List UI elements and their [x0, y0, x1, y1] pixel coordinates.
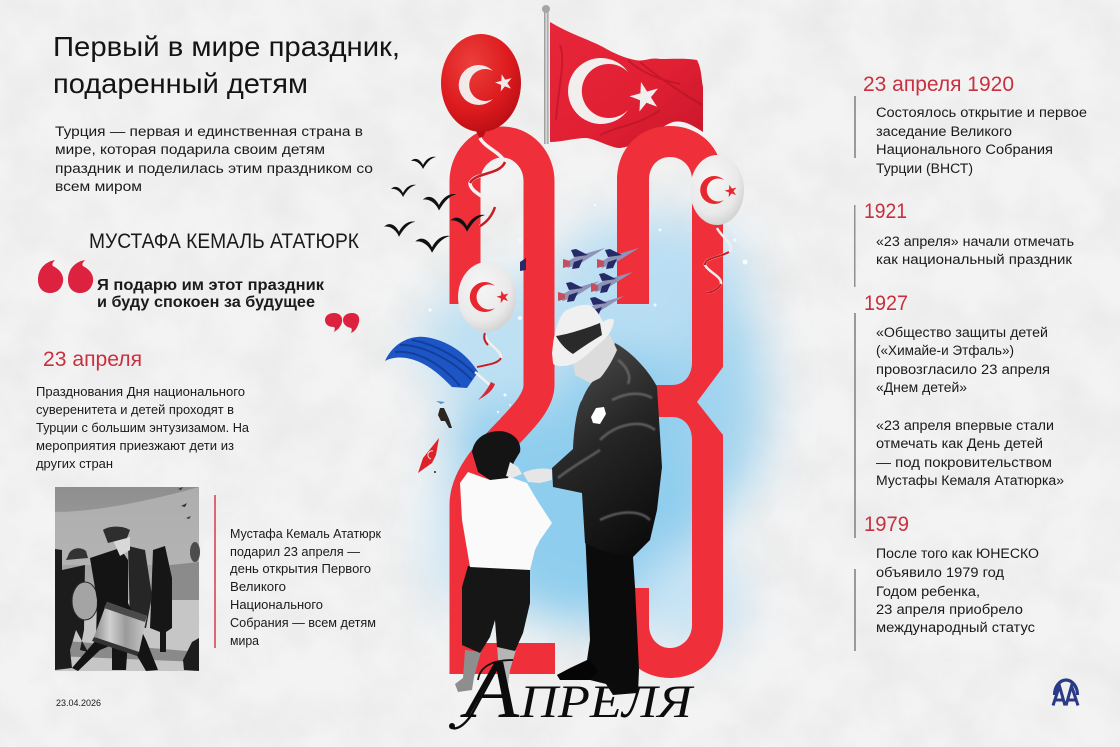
paratrooper	[436, 401, 452, 428]
timeline: 1979: Годом ребенка,	[876, 584, 980, 600]
heading: подаренный детям	[53, 68, 308, 99]
Turkish flag	[550, 22, 703, 148]
legs	[557, 530, 645, 695]
timeline: 1921: как национальный праздник	[876, 252, 1073, 268]
section: 23 апреля: мероприятия приезжают дети из	[36, 438, 234, 453]
timeline: 1927: 1927	[864, 292, 908, 315]
hand	[523, 469, 552, 483]
photo caption: мира	[230, 633, 260, 648]
face	[573, 335, 617, 383]
timeline: 23 апреля 1920: 23 апреля 1920	[863, 73, 1014, 96]
blue sky cloud	[420, 204, 765, 650]
birds	[384, 157, 485, 253]
photo caption: день открытия Первого	[230, 561, 371, 576]
title: Апреля	[449, 643, 695, 736]
quote text: Я подарю им этот праздник	[97, 277, 325, 294]
timeline: 1927: «Днем детей»	[876, 380, 967, 396]
timeline: 1979: объявило 1979 год	[876, 565, 1005, 581]
timeline: 1927: Мустафы Кемаля Ататюрка»	[876, 473, 1064, 489]
date: 23.04.2026	[56, 698, 101, 709]
timeline: 1979: международный статус	[876, 620, 1035, 636]
timeline: 23 апреля 1920	[854, 73, 1087, 177]
timeline: 1927: отмечать как День детей	[876, 436, 1043, 452]
head	[472, 431, 520, 480]
heading	[53, 31, 400, 99]
quote text	[97, 277, 325, 311]
photo caption: Великого	[230, 579, 286, 594]
digit 2	[465, 142, 555, 658]
intro text: всем миром	[55, 179, 142, 195]
heading: Первый в мире праздник,	[53, 31, 400, 62]
section: 23 апреля: 23 апреля	[43, 348, 142, 371]
jacket highlights	[558, 360, 655, 520]
photo caption: Мустафа Кемаль Ататюрк	[230, 526, 381, 541]
balloon: white left	[458, 262, 516, 367]
hat	[552, 305, 614, 366]
jacket	[552, 343, 662, 557]
timeline: 1927	[854, 292, 1064, 538]
timeline: 1927: («Химайе-и Этфаль»)	[876, 343, 1014, 359]
photo caption: Национального	[230, 597, 323, 612]
pocket square	[591, 407, 606, 424]
section: 23 апреля: других стран	[36, 456, 113, 471]
timeline: 1921: 1921	[864, 200, 907, 223]
quote text: и буду спокоен за будущее	[97, 294, 315, 311]
balloon: red	[441, 34, 521, 226]
small red flag	[418, 438, 439, 473]
timeline: 23 апреля 1920: Национального Собрания	[876, 142, 1053, 158]
timeline: 1979	[854, 513, 1039, 651]
intro text: Турция — первая и единственная страна в	[55, 124, 363, 140]
shorts	[462, 566, 530, 653]
big number 23	[465, 126, 723, 678]
timeline: 1927: «Общество защиты детей	[876, 325, 1048, 341]
timeline: 1979: 23 апреля приобрело	[876, 602, 1023, 618]
icon: closing quote marks	[325, 313, 359, 333]
timeline: 23 апреля 1920: Состоялось открытие и первое	[876, 105, 1087, 121]
timeline: 1979: 1979	[864, 513, 909, 536]
icon: AA agency logo	[1053, 680, 1078, 706]
timeline: 23 апреля 1920: заседание Великого	[876, 124, 1012, 140]
section: 23 апреля: суверенитета и детей проходят в	[36, 402, 234, 417]
timeline: 1921	[854, 200, 1074, 287]
balloon: white right	[690, 155, 744, 293]
photo: children's marching band	[55, 487, 200, 671]
intro text: праздник и поделилась этим праздником со	[55, 161, 373, 177]
timeline: 1979: После того как ЮНЕСКО	[876, 546, 1039, 562]
section: 23 апреля: Турции с большим энтузизамом. На	[36, 420, 250, 435]
section: 23 апреля	[36, 348, 250, 471]
timeline: 23 апреля 1920: Турции (ВНСТ)	[876, 161, 973, 177]
caption rule	[214, 495, 216, 648]
quote author: МУСТАФА КЕМАЛЬ АТАТЮРК	[89, 230, 360, 253]
parachute	[385, 337, 495, 400]
icon: opening quote marks	[38, 260, 93, 293]
digit 3	[617, 126, 723, 678]
shirt	[460, 472, 552, 570]
flag pole	[542, 5, 550, 144]
boy figure	[455, 431, 552, 692]
section: 23 апреля: Празднования Дня национального	[36, 384, 245, 399]
legs	[455, 650, 481, 692]
timeline: 1927: «23 апреля впервые стали	[876, 418, 1054, 434]
photo caption: Собрания — всем детям	[230, 615, 376, 630]
shoe	[557, 660, 598, 680]
intro text: мире, которая подарила своим детям	[55, 142, 325, 158]
timeline: 1927: — под покровительством	[876, 455, 1052, 471]
timeline: 1921: «23 апреля» начали отмечать	[876, 234, 1074, 250]
title: Апреля: ПРЕЛЯ	[519, 676, 695, 728]
photo caption	[230, 526, 381, 648]
jet formation	[520, 248, 639, 317]
timeline: 1927: провозгласило 23 апреля	[876, 362, 1050, 378]
Atatürk figure	[523, 305, 662, 695]
intro text	[55, 124, 373, 195]
title: Апреля: А	[460, 643, 520, 736]
photo caption: подарил 23 апреля —	[230, 544, 361, 559]
